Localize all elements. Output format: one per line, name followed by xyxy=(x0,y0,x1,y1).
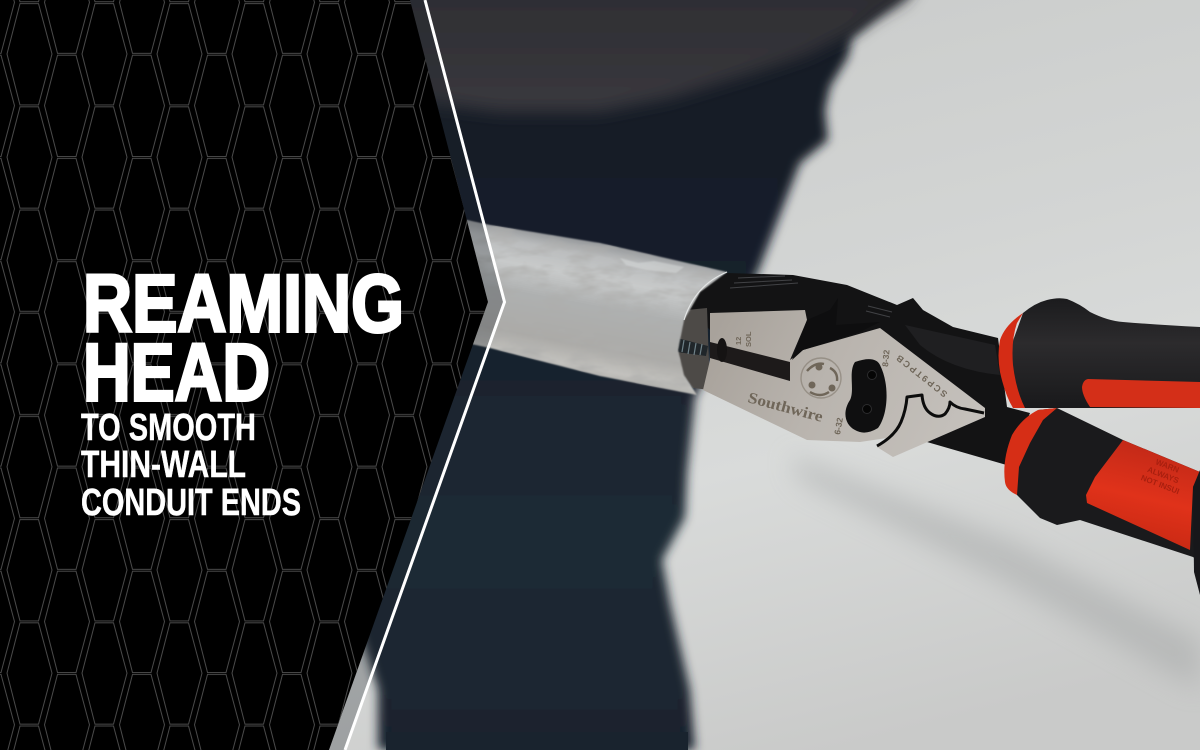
pliers: lower handle red panel xyxy=(1086,440,1200,550)
pliers: knurled grip highlight xyxy=(730,276,892,317)
pliers xyxy=(672,273,1200,595)
conduit surface grain xyxy=(467,220,712,389)
subtitle text block xyxy=(81,407,301,524)
subtitle line 3: CONDUIT ENDS xyxy=(81,482,301,524)
hexagon pattern xyxy=(0,0,490,750)
pliers: 8-32 stamp: 8-32 xyxy=(880,349,891,367)
pliers: 6-32 stamp: 6-32 xyxy=(832,417,845,435)
pliers: stamped logo mark xyxy=(801,358,841,398)
pliers: model number stamp: SCP9TPCB xyxy=(894,353,949,399)
pliers: far-end handle shadow xyxy=(1193,470,1200,595)
pliers: curved crimp notch xyxy=(877,395,984,446)
pliers: textured arm sheen xyxy=(905,325,1000,375)
pliers: hole rivets xyxy=(862,370,876,414)
translucent band beside the panel xyxy=(329,0,505,750)
pliers: upper handle red inlay xyxy=(1082,379,1200,408)
title line: HEAD: HEAD xyxy=(83,328,270,418)
pliers: screw in jaw xyxy=(677,338,708,356)
pliers: SOL stamp: SOL xyxy=(744,331,753,347)
heading xyxy=(81,258,404,524)
pliers: crimp hole xyxy=(845,359,887,433)
pliers: lower handle red collar xyxy=(1004,408,1057,495)
pliers: 12 gauge stamp: 12 xyxy=(734,337,743,345)
photo: blurred dark shirt xyxy=(300,0,930,112)
photo: blurred jeans xyxy=(300,0,925,750)
photo: jeans hem reaching the lower edge xyxy=(386,732,688,750)
pliers: steel jaw plate xyxy=(703,310,985,457)
pliers: wedge shadow between jaws xyxy=(792,298,880,360)
subtitle line 2: THIN-WALL xyxy=(81,444,246,486)
pliers: warning text on handle: NOT INSUI xyxy=(1140,473,1181,496)
pliers: upper handle red collar xyxy=(998,313,1025,408)
pliers: brand name: Southwire xyxy=(746,389,825,426)
pliers: warning text on handle: WARN xyxy=(1154,457,1181,475)
pliers: cutting slot xyxy=(710,342,790,381)
white chevron outline arrow xyxy=(345,0,504,750)
photo: cast shadow on wall xyxy=(790,455,1200,690)
pliers: lower handle grip xyxy=(1008,408,1200,562)
panel: black hexagon-pattern chevron xyxy=(0,0,490,750)
pliers: screw thread highlights xyxy=(682,340,702,355)
pliers: slot bump xyxy=(717,338,727,362)
pliers: warning text on handle: ALWAYS xyxy=(1146,465,1181,485)
pliers: upper handle grip xyxy=(1006,298,1200,408)
subtitle line 1: TO SMOOTH xyxy=(81,407,256,449)
conduit rim highlight xyxy=(684,272,727,320)
pliers: dark inside of pipe xyxy=(672,308,710,390)
title line: REAMING: REAMING xyxy=(83,258,404,350)
photo: aluminium conduit pipe xyxy=(466,219,728,396)
pliers: black forged body xyxy=(680,273,1030,466)
conduit surface wear xyxy=(620,258,684,273)
